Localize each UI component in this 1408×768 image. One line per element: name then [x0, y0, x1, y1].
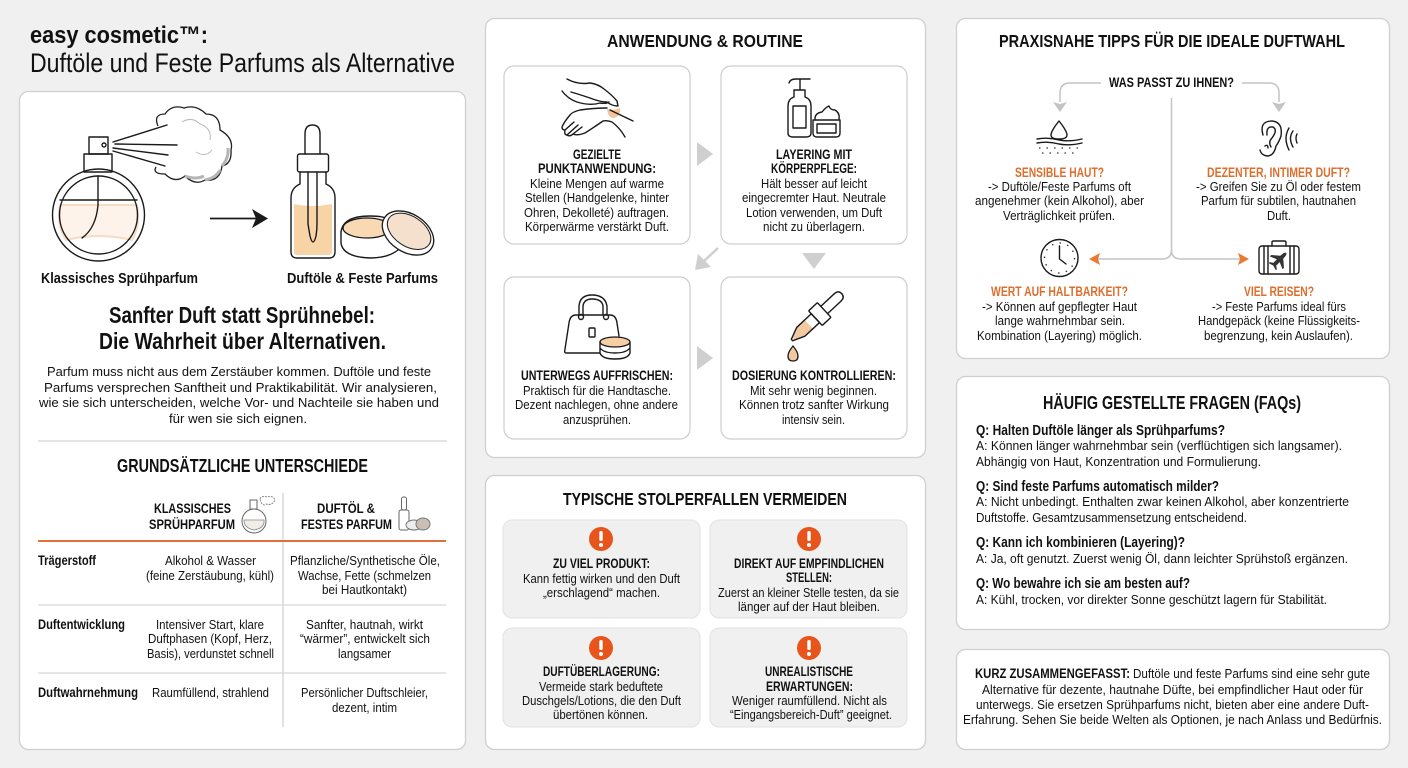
FAQ 4: Q: Wo bewahre ich sie am besten auf? [976, 576, 1190, 592]
column header: oils and solid perfumes: FESTES PARFUM [301, 517, 392, 532]
FAQ 1 [976, 423, 1342, 469]
card text: DUFTÜBERLAGERUNG: [543, 664, 660, 679]
card text: anzusprühen. [563, 412, 631, 427]
row: scent development: Basis), verdunstet schnell [147, 646, 274, 661]
intro text: Parfums versprechen Sanftheit und Praktikabilität. Wir analysieren, [44, 380, 437, 395]
tip: sensitive skin [975, 121, 1145, 223]
card text: UNREALISTISCHE [765, 664, 853, 679]
FAQ 4 [976, 576, 1327, 607]
row: scent development [38, 617, 430, 661]
card text: LAYERING MIT [776, 147, 853, 162]
icon: spray perfume bottle [52, 137, 144, 261]
card: layering with body care [721, 66, 907, 244]
headline: Die Wahrheit über Alternativen. [99, 328, 386, 354]
FAQ 3 [976, 535, 1348, 566]
tip: travel [1198, 241, 1360, 343]
card text [718, 556, 899, 614]
FAQ 3: Q: Kann ich kombinieren (Layering)? [976, 535, 1185, 551]
tip text: -> Können auf gepflegter Haut [982, 299, 1137, 314]
row: scent perception: Persönlicher Duftschleier, [301, 685, 428, 700]
card: fragrance overlap [503, 628, 700, 727]
intro text: für wen sie sich eignen. [169, 411, 307, 426]
card text: Vermeide stark beduftete [539, 679, 663, 694]
panel: typical pitfalls [486, 476, 926, 750]
tip text: Handgepäck (keine Flüssigkeits- [1198, 313, 1360, 328]
heading: ANWENDUNG & ROUTINE [607, 31, 803, 51]
card text: Körperwärme verstärkt Duft. [525, 219, 669, 234]
card text: PUNKTANWENDUNG: [538, 161, 656, 176]
card text [732, 368, 896, 427]
tip text: DEZENTER, INTIMER DUFT? [1207, 165, 1350, 180]
tip text [1198, 284, 1360, 343]
icon: ear [1260, 121, 1297, 156]
card text: DOSIERUNG KONTROLLIEREN: [732, 368, 896, 383]
tip text: Verträglichkeit prüfen. [1003, 208, 1115, 223]
FAQ 3: A: Ja, oft genutzt. Zuerst wenig Öl, dann leichter Sprühstoß ergänzen. [976, 551, 1348, 566]
summary text: unterwegs. Sie ersetzen Sprühparfums nicht, bieten aber eine andere Duft- [976, 697, 1369, 712]
icon: warning [589, 527, 613, 551]
card: refreshing on the go [504, 277, 690, 439]
heading: HÄUFIG GESTELLTE FRAGEN (FAQs) [1043, 392, 1301, 413]
card text [515, 368, 678, 427]
tip text: -> Duftöle/Feste Parfums oft [988, 179, 1131, 194]
icon: handbag and jar [565, 295, 630, 359]
icon: warning [797, 527, 821, 551]
row: carrier [38, 553, 440, 597]
card text: ZU VIEL PRODUKT: [553, 556, 650, 571]
card text: DIREKT AUF EMPFINDLICHEN [734, 556, 884, 571]
card text: ERWARTUNGEN: [766, 679, 853, 694]
card text: Duschgels/Lotions, die den Duft [522, 693, 681, 708]
card text: “Eingangsbereich-Duft” geeignet. [730, 707, 892, 722]
card text: Mit sehr wenig beginnen. [750, 383, 877, 398]
card text: KÖRPERPFLEGE: [771, 161, 857, 176]
card text [523, 556, 680, 600]
summary text [963, 666, 1382, 727]
card text: Zuerst an kleiner Stelle testen, da sie [718, 585, 899, 600]
row: scent perception [38, 685, 428, 715]
tip text: WERT AUF HALTBARKEIT? [991, 284, 1128, 299]
icon: dropper bottle [291, 125, 335, 258]
FAQ 2 [976, 479, 1349, 525]
tip text [977, 284, 1142, 343]
icon: drop on skin [1037, 121, 1082, 153]
icon: pipette with drop [785, 286, 849, 361]
row: scent development: Duftphasen (Kopf, Herz, [148, 631, 272, 646]
row: scent development: Intensiver Start, klare [156, 617, 264, 632]
card text: UNTERWEGS AUFFRISCHEN: [521, 368, 673, 383]
icon: lotion bottle and cream jar [788, 79, 840, 137]
row: carrier: (feine Zerstäubung, kühl) [146, 568, 274, 583]
panel: summary [956, 650, 1390, 750]
tip text: Kombination (Layering) möglich. [977, 328, 1142, 343]
summary text: Alternative für dezente, hautnahe Düfte, bei empfindlicher Haut oder für [982, 682, 1364, 697]
card text: länger auf der Haut bleiben. [738, 599, 880, 614]
row: carrier: Alkohol & Wasser [165, 553, 257, 568]
column header: spray perfume: SPRÜHPARFUM [149, 517, 235, 532]
tip text [975, 165, 1145, 223]
row: scent perception: Raumfüllend, strahlend [152, 685, 269, 700]
card text: eingecremter Haut. Neutrale [742, 190, 886, 205]
tip text: angenehmer (kein Alkohol), aber [975, 193, 1145, 208]
decision arrows [1053, 83, 1286, 265]
intro text: Parfum muss nicht aus dem Zerstäuber kommen. Duftöle und feste [47, 364, 431, 379]
icon: solid perfume jar [341, 202, 442, 264]
card text: Kann fettig wirken und den Duft [523, 571, 680, 586]
FAQ 2: Q: Sind feste Parfums automatisch milder? [976, 479, 1219, 495]
icon: clock [1041, 240, 1078, 276]
arrow: right [697, 142, 713, 166]
icon: spray cloud [113, 107, 232, 182]
column header: oils and solid perfumes [301, 497, 430, 532]
label: classic spray perfume: Klassisches Sprühparfum [41, 270, 198, 287]
tip text: SENSIBLE HAUT? [1015, 165, 1104, 180]
row: scent development: “wärmer”, entwickelt sich [300, 631, 430, 646]
card text: Stellen (Handgelenke, hinter [525, 190, 670, 205]
tip text: -> Feste Parfums ideal fürs [1212, 299, 1346, 314]
card text [522, 664, 681, 722]
column header: spray perfume: KLASSISCHES [154, 501, 231, 516]
row: scent development: langsamer [338, 646, 392, 661]
panel: application and routine [486, 18, 926, 458]
row: carrier: Pflanzliche/Synthetische Öle, [290, 553, 440, 568]
tip text: begrenzung, kein Auslaufen). [1204, 328, 1353, 343]
row: scent perception: dezent, intim [332, 700, 397, 715]
intro text [38, 364, 439, 426]
tip text: Duft. [1267, 208, 1291, 223]
FAQ 2: A: Nicht unbedingt. Enthalten zwar keinen Alkohol, aber konzentrierte [976, 494, 1349, 509]
heading: TYPISCHE STOLPERFALLEN VERMEIDEN [563, 489, 847, 509]
row: carrier: bei Hautkontakt) [322, 582, 407, 597]
arrow: diagonal [695, 248, 718, 270]
question: WAS PASST ZU IHNEN? [1109, 75, 1234, 90]
arrow: down [802, 253, 826, 269]
tip text: Parfum für subtilen, hautnahen [1201, 193, 1356, 208]
arrow: spray to alternatives [210, 209, 268, 228]
card: sensitive areas [710, 520, 907, 618]
tip text: -> Greifen Sie zu Öl oder festem [1196, 179, 1361, 194]
icon: warning [797, 636, 821, 660]
FAQ 1: Q: Halten Duftöle länger als Sprühparfums? [976, 423, 1225, 439]
label: oils and solid perfumes: Duftöle & Feste Parfums [287, 270, 438, 287]
card text: Können trotz sanfter Wirkung [739, 397, 889, 412]
row: carrier: Trägerstoff [38, 553, 96, 568]
card text [730, 664, 892, 722]
FAQ 1: A: Können länger wahrnehmbar sein (verflüchtigen sich langsamer). [976, 438, 1342, 453]
tip text: lange wahrnehmbar sein. [995, 313, 1125, 328]
row: scent perception: Duftwahrnehmung [38, 685, 138, 700]
row: scent development: Duftentwicklung [38, 617, 125, 632]
icon: hands on wrist [562, 79, 633, 137]
card text: intensiv sein. [782, 412, 845, 427]
comparison heading: GRUNDSÄTZLICHE UNTERSCHIEDE [117, 456, 368, 476]
card text: Dezent nachlegen, ohne andere [515, 397, 678, 412]
arrow: right [697, 346, 713, 370]
card: too much product [503, 520, 700, 618]
card text: Lotion verwenden, um Duft [746, 205, 882, 220]
FAQ 1: Abhängig von Haut, Konzentration und Formulierung. [976, 454, 1261, 469]
panel: practical tips [956, 18, 1390, 358]
panel: FAQs [956, 376, 1390, 630]
card: targeted application [504, 66, 690, 244]
column header: spray perfume [149, 496, 275, 533]
card: controlling the dose [721, 277, 907, 439]
tip: discreet scent [1196, 121, 1361, 223]
card text: Weniger raumfüllend. Nicht als [732, 693, 887, 708]
card text: STELLEN: [786, 570, 832, 585]
card text: nicht zu überlagern. [763, 219, 865, 234]
intro text: wie sie sich unterscheiden, welche Vor- und Nachteile sie haben und [38, 395, 439, 410]
tip: longevity [977, 240, 1142, 343]
title: Duftöle und Feste Parfums als Alternative [30, 48, 455, 78]
card text: Ohren, Dekolleté) auftragen. [524, 205, 669, 220]
headline [99, 302, 386, 354]
summary text: KURZ ZUSAMMENGEFASST: [975, 666, 1130, 681]
card text: „erschlagend“ machen. [543, 585, 660, 600]
summary text: Erfahrung. Sehen Sie beide Welten als Optionen, je nach Anlass und Bedürfnis. [963, 712, 1382, 727]
card text: Hält besser auf leicht [761, 176, 867, 191]
summary text: Duftöle und feste Parfums sind eine sehr gute [1133, 666, 1370, 681]
tip text: VIEL REISEN? [1244, 284, 1314, 299]
column header: oils and solid perfumes: DUFTÖL & [317, 501, 375, 516]
card: unrealistic expectations [710, 628, 907, 727]
panel: introduction and differences [20, 92, 466, 750]
icon: suitcase with plane [1259, 241, 1299, 274]
row: carrier: Wachse, Fette (schmelzen [298, 568, 431, 583]
icon: warning [589, 636, 613, 660]
FAQ 2: Duftstoffe. Gesamtzusammensetzung entscheidend. [976, 510, 1247, 525]
card text [742, 147, 886, 234]
tip text [1196, 165, 1361, 223]
heading: PRAXISNAHE TIPPS FÜR DIE IDEALE DUFTWAHL [999, 31, 1345, 51]
row: scent development: Sanfter, hautnah, wirkt [306, 617, 423, 632]
comparison table [38, 493, 446, 727]
FAQ 4: A: Kühl, trocken, vor direkter Sonne geschützt lagern für Stabilität. [976, 592, 1327, 607]
title: easy cosmetic™: [30, 22, 208, 49]
card text: Praktisch für die Handtasche. [523, 383, 671, 398]
card text: GEZIELTE [573, 147, 621, 162]
title [30, 22, 455, 78]
card text: Kleine Mengen auf warme [530, 176, 664, 191]
card text: übertönen können. [553, 707, 648, 722]
headline: Sanfter Duft statt Sprühnebel: [109, 302, 375, 328]
card text [524, 147, 670, 234]
